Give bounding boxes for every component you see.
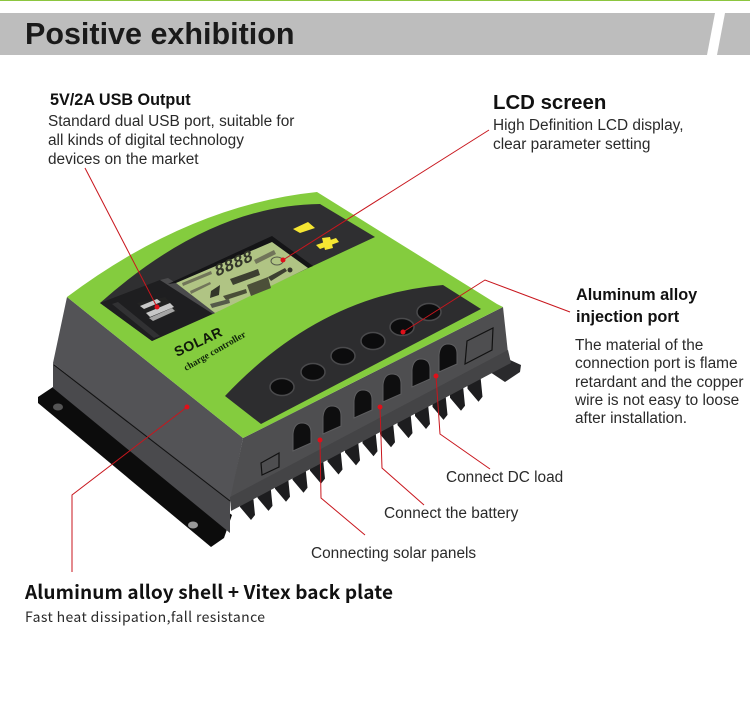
port heading: Aluminum alloy xyxy=(576,286,697,304)
label: solar panels: Connecting solar panels xyxy=(311,545,476,562)
leader: solar panels xyxy=(318,438,365,535)
callout: shell xyxy=(24,578,393,627)
callout: LCD screen xyxy=(493,92,683,153)
callout: USB output xyxy=(48,91,294,168)
label: battery: Connect the battery xyxy=(384,505,518,522)
leader: shell xyxy=(72,404,190,572)
leader: USB xyxy=(85,168,160,310)
brand text: SOLAR xyxy=(172,323,225,360)
small square mark xyxy=(261,453,279,475)
port description: retardant and the copper xyxy=(575,374,744,391)
USB heading: 5V/2A USB Output xyxy=(50,91,191,109)
shell description: Fast heat dissipation,fall resistance xyxy=(25,607,265,627)
port description xyxy=(575,337,744,427)
port description: wire is not easy to loose xyxy=(575,392,739,409)
leader: DC load xyxy=(434,374,490,469)
USB description: devices on the market xyxy=(48,151,199,168)
left side shell xyxy=(53,297,243,533)
leader: battery xyxy=(378,404,424,505)
port description: connection port is flame xyxy=(575,355,738,372)
LCD heading: LCD screen xyxy=(493,92,606,114)
large square mark xyxy=(465,328,493,364)
LCD description xyxy=(493,117,683,153)
LCD description: clear parameter setting xyxy=(493,136,650,153)
cooling fins xyxy=(240,377,482,520)
mounting flange xyxy=(38,360,521,547)
dark display panel xyxy=(100,204,375,341)
header band xyxy=(0,13,750,55)
LCD description: High Definition LCD display, xyxy=(493,117,683,134)
port description: The material of the xyxy=(575,337,703,354)
USB description: Standard dual USB port, suitable for xyxy=(48,113,294,130)
port heading xyxy=(576,286,698,326)
USB description xyxy=(48,113,294,168)
dark terminal panel xyxy=(225,285,481,424)
leader: injection port xyxy=(400,280,570,334)
yellow plus symbol xyxy=(316,237,339,250)
USB recess xyxy=(100,278,219,341)
top terminal holes xyxy=(270,304,441,396)
shell heading: Aluminum alloy shell + Vitex back plate xyxy=(25,578,393,605)
LCD screen: 8888 xyxy=(214,247,254,283)
yellow minus symbol xyxy=(293,222,315,233)
front connector face xyxy=(230,307,511,511)
green top cover xyxy=(67,192,503,438)
callout: aluminum alloy injection port xyxy=(575,286,744,427)
USB description: all kinds of digital technology xyxy=(48,132,244,149)
top green rule xyxy=(0,0,750,1)
leader: LCD xyxy=(280,130,489,262)
LCD screen xyxy=(168,236,313,313)
label: DC load: Connect DC load xyxy=(446,469,563,486)
brand text: charge controller xyxy=(182,330,249,374)
title: Positive exhibition xyxy=(25,17,294,51)
front wire ports xyxy=(293,344,457,451)
port heading: injection port xyxy=(576,308,679,326)
port description: after installation. xyxy=(575,410,687,427)
USB ports xyxy=(137,297,178,321)
